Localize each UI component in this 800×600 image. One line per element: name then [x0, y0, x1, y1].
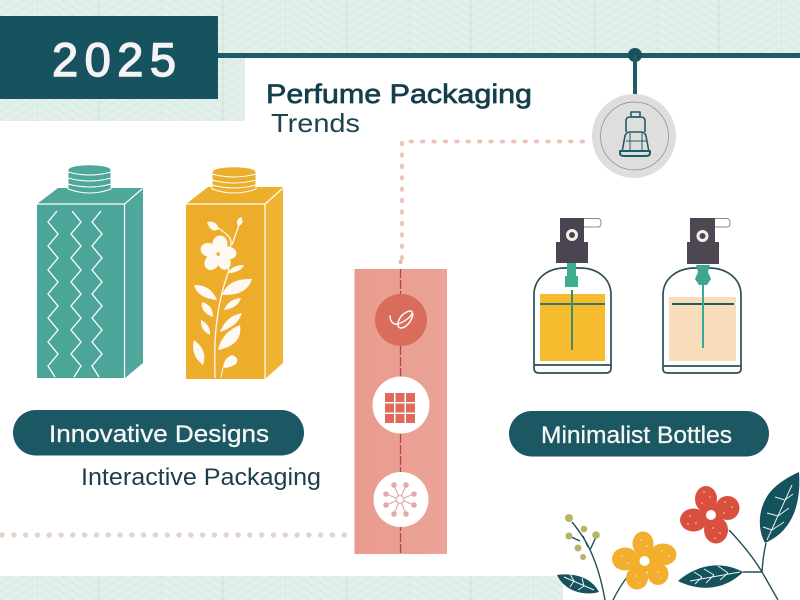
label: Interactive Packaging: Interactive Packaging	[81, 464, 321, 491]
stems	[569, 522, 778, 600]
label pill: Minimalist Bottles	[509, 411, 769, 456]
yellow flower	[612, 532, 676, 590]
year banner: 2025	[52, 33, 176, 86]
peach bottle liquid	[669, 297, 736, 361]
teal patterned box	[37, 165, 143, 378]
icon: signature loop	[375, 294, 427, 346]
floral motif	[193, 217, 252, 378]
yellow floral box	[186, 167, 283, 379]
label pill: Innovative Designs: Innovative Designs	[49, 421, 269, 448]
yellow box cap	[212, 167, 256, 193]
centre panel	[354, 260, 447, 554]
floral corner illustration	[557, 472, 799, 600]
title: Trends	[271, 108, 360, 138]
leaves	[557, 472, 799, 593]
minimalist bottle: peach	[663, 218, 741, 373]
dotted connector: lower	[2, 532, 345, 538]
sprig buds	[565, 514, 600, 560]
label pill: Innovative Designs	[13, 410, 304, 456]
title: Perfume Packaging	[266, 79, 532, 109]
leaf veins	[564, 485, 793, 590]
icon: grid	[372, 376, 430, 434]
year banner	[0, 16, 218, 99]
title	[266, 79, 532, 138]
amber bottle liquid	[540, 294, 605, 361]
teal box body	[37, 188, 143, 378]
timeline rule with node	[218, 48, 800, 96]
peach bottle pump	[687, 218, 730, 264]
amber bottle glass	[534, 268, 611, 373]
icon: bottle badge	[592, 94, 676, 178]
peach bottle tube	[672, 265, 734, 348]
amber bottle tube	[540, 263, 605, 350]
amber bottle pump	[556, 218, 601, 263]
label pill: Minimalist Bottles: Minimalist Bottles	[541, 422, 732, 449]
zigzag pattern	[48, 211, 102, 377]
minimalist bottle: amber	[534, 218, 611, 373]
teal box cap	[68, 165, 111, 193]
yellow box body	[186, 187, 283, 379]
icon: network	[374, 472, 428, 527]
red flower	[680, 486, 740, 544]
dotted connector: upper	[402, 142, 583, 268]
peach bottle glass	[663, 268, 741, 373]
